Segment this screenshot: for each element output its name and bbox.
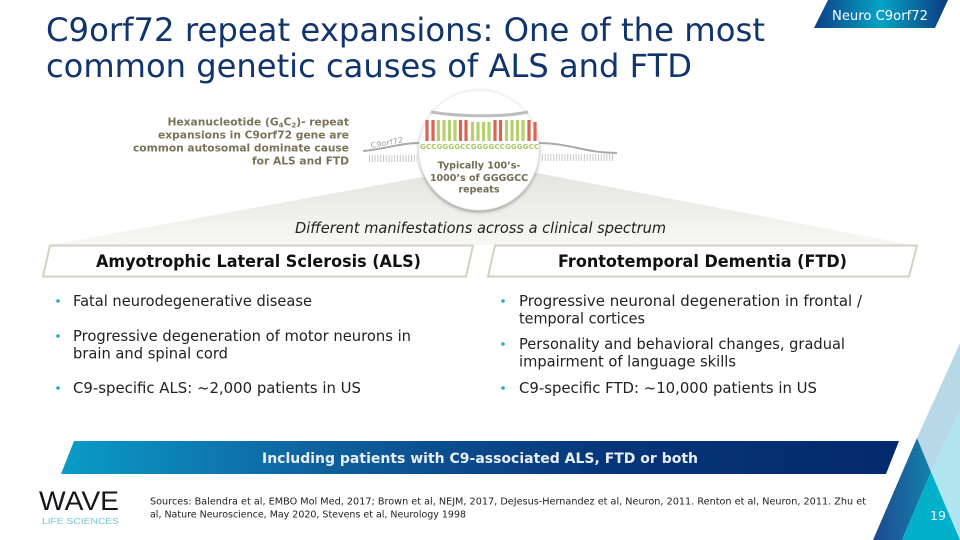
text block: hexanucleotide description: common autosomal dominate cause xyxy=(133,142,349,154)
label: typical repeat count xyxy=(430,160,528,196)
spectrum background wedge xyxy=(50,173,912,245)
bullet list: FTD: Personality and behavioral changes, gradual xyxy=(519,335,845,353)
title: C9orf72 repeat expansions: One of the most xyxy=(46,11,765,49)
gene strand: C9orf72 xyxy=(363,135,617,158)
gene strand: C9orf72: C9orf72 xyxy=(370,135,404,150)
text block: hexanucleotide description: for ALS and FTD xyxy=(252,154,349,168)
label: typical repeat count: Typically 100’s- xyxy=(438,160,520,172)
label: typical repeat count: 1000’s of GGGGCC xyxy=(430,173,528,184)
bullet list: FTD: Progressive neuronal degeneration in frontal / xyxy=(519,292,863,310)
text block: hexanucleotide description: Hexanucleotide (G xyxy=(167,116,279,128)
bullet list: FTD xyxy=(501,292,863,397)
sources: Sources: Balendra et al, EMBO Mol Med, 2017; Brown et al, NEJM, 2017, DeJesus-Hernandez et al, Neuron, 2011. Renton et al, Neuron, 2011. Zhu et xyxy=(150,496,866,508)
text block: hexanucleotide description: expansions in C9orf72 gene are xyxy=(158,128,349,142)
text block: hexanucleotide description xyxy=(133,116,349,168)
heading box: FTD: Frontotemporal Dementia (FTD) xyxy=(558,252,847,271)
bullet list: ALS: C9-specific ALS: ~2,000 patients in US xyxy=(73,379,361,397)
logo: Wave Life Sciences: LIFE SCIENCES xyxy=(42,517,119,526)
text block: hexanucleotide description: )- repeat xyxy=(296,116,349,128)
banner: patient scope xyxy=(61,441,899,474)
bullet list: ALS xyxy=(56,292,411,397)
subtitle: clinical spectrum: Different manifestations across a clinical spectrum xyxy=(295,219,666,237)
bullet list: FTD: impairment of language skills xyxy=(519,352,736,370)
sources: al, Nature Neuroscience, May 2020, Stevens et al, Neurology 1998 xyxy=(150,510,466,520)
title: common genetic causes of ALS and FTD xyxy=(46,47,692,85)
title xyxy=(46,11,765,85)
bullet list: ALS: Fatal neurodegenerative disease xyxy=(73,292,312,310)
text block: hexanucleotide description: C xyxy=(284,116,292,128)
magnifier circle: repeat sequence: GCCGGGGCCGGGGCCGGGGCC xyxy=(420,143,539,151)
banner: patient scope: Including patients with C9-associated ALS, FTD or both xyxy=(262,451,698,467)
heading box: ALS: Amyotrophic Lateral Sclerosis (ALS) xyxy=(96,252,421,271)
tag: Neuro C9orf72: Neuro C9orf72 xyxy=(832,8,928,24)
bullet list: FTD: C9-specific FTD: ~10,000 patients in US xyxy=(519,379,817,397)
page number: 19 xyxy=(930,508,946,523)
logo: Wave Life Sciences: WAVE xyxy=(39,486,119,516)
label: typical repeat count: repeats xyxy=(459,184,500,196)
bullet list: ALS: Progressive degeneration of motor neurons in xyxy=(73,327,411,345)
heading box: ALS xyxy=(43,246,473,276)
heading box: FTD xyxy=(488,246,917,276)
bullet list: ALS: brain and spinal cord xyxy=(73,344,228,362)
corner decoration: triangles xyxy=(873,343,960,540)
magnifier circle: repeat sequence xyxy=(419,90,539,210)
text block: hexanucleotide description: 2 xyxy=(291,122,296,130)
sources xyxy=(150,496,866,520)
text block: hexanucleotide description: 4 xyxy=(279,122,284,130)
bullet list: FTD: temporal cortices xyxy=(519,310,645,328)
tag: Neuro C9orf72 xyxy=(814,0,948,28)
